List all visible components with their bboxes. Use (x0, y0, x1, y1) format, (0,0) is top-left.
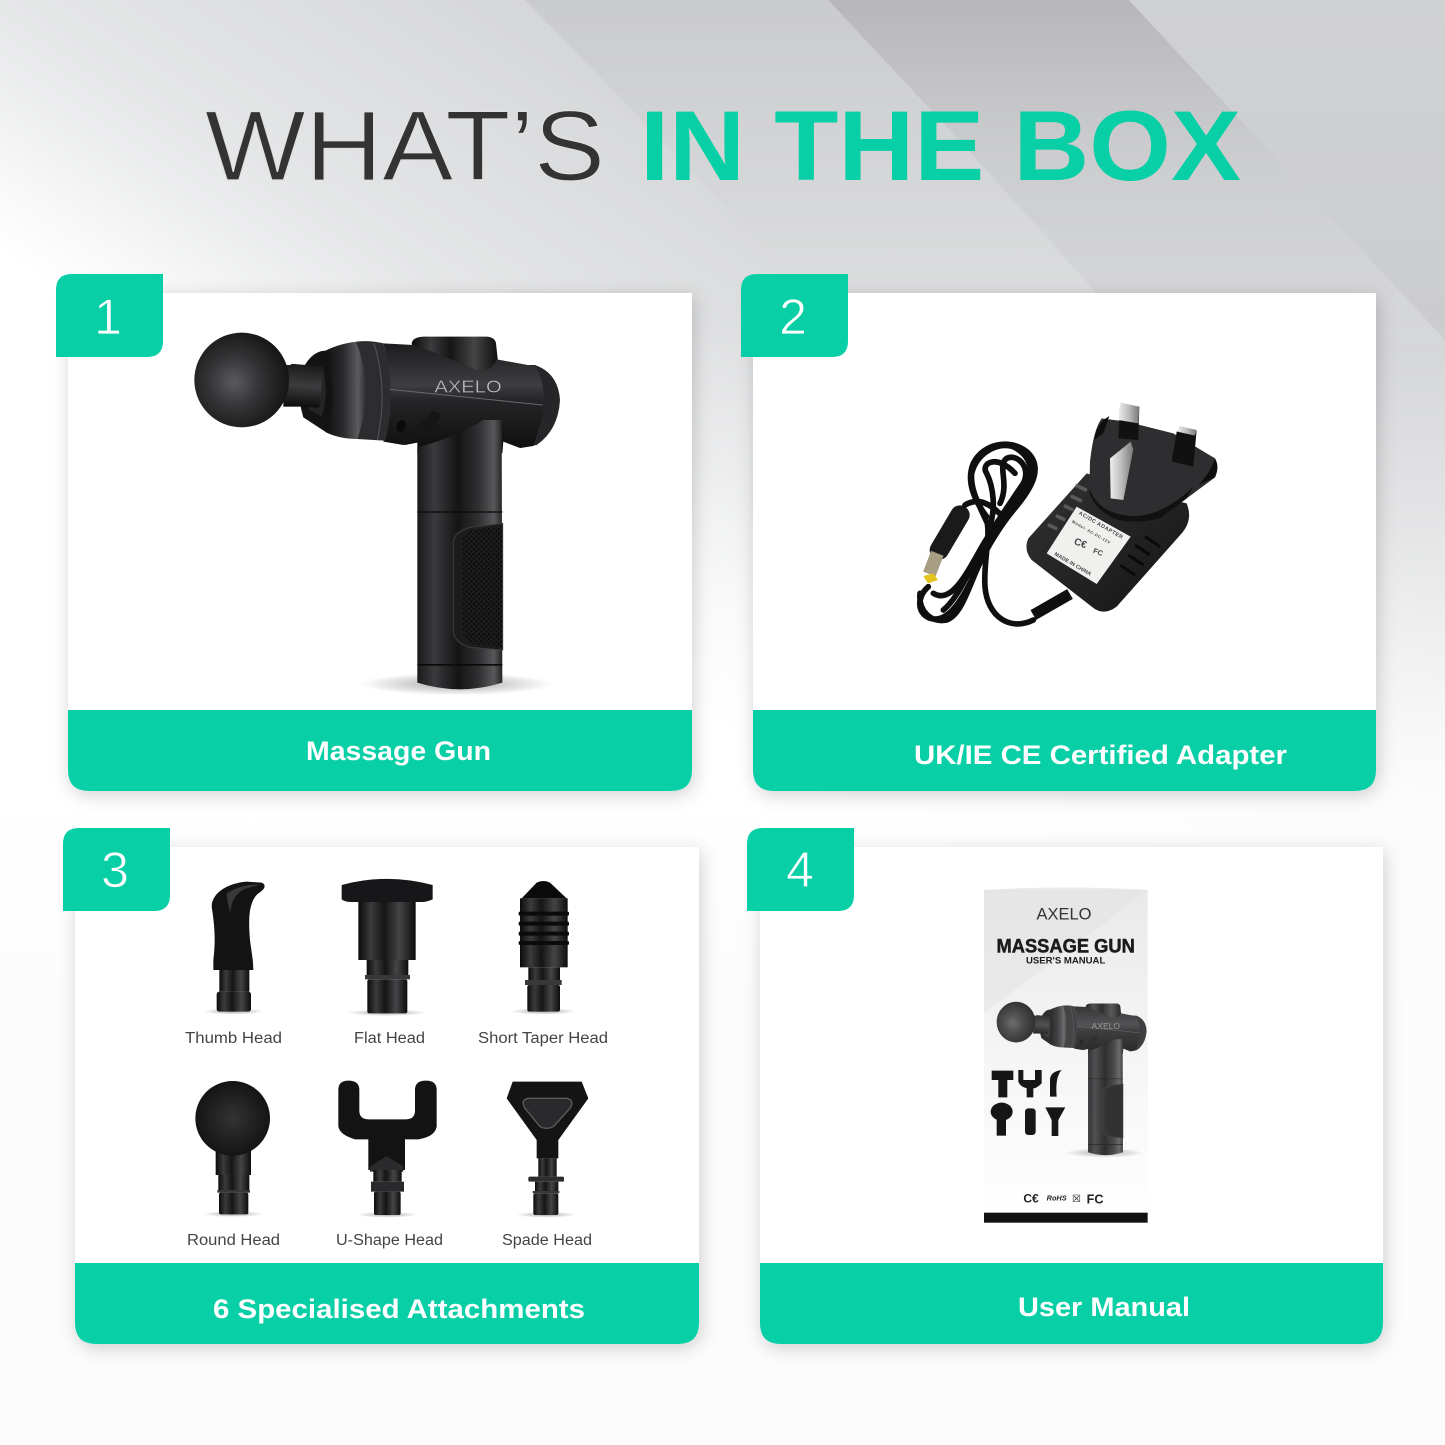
booklet text: AXELO (1036, 904, 1092, 923)
adapter label: FC (1092, 546, 1105, 558)
booklet certification marks: ☒ (1072, 1194, 1081, 1205)
adapter body (1026, 473, 1189, 612)
card 2 caption: UK/IE CE Certified Adapter (914, 740, 1288, 770)
booklet page (984, 887, 1148, 1223)
card 4 number tab: 4 (786, 842, 814, 898)
card 1 number tab (56, 274, 163, 357)
card 3 background (75, 847, 699, 1344)
cable (920, 444, 1035, 624)
attachment labels: Short Taper Head (478, 1030, 608, 1047)
connector plug (923, 515, 960, 583)
booklet certification marks: C€ (1023, 1192, 1039, 1206)
panel: attachments (63, 828, 699, 1344)
attachment labels: U-Shape Head (336, 1232, 443, 1249)
booklet certification marks (1023, 1192, 1104, 1206)
booklet text: USER'S MANUAL (1026, 955, 1106, 965)
title: WHAT’S (205, 90, 605, 201)
booklet attachments (991, 1070, 1065, 1136)
adapter label: C€ (1072, 536, 1088, 551)
manual booklet (984, 887, 1148, 1223)
attachment: short taper head (510, 881, 577, 1015)
attachment labels: Thumb Head (185, 1030, 282, 1047)
adapter label: AC/DC ADAPTER (1077, 511, 1124, 541)
card 3 caption: 6 Specialised Attachments (213, 1294, 585, 1324)
card 4 caption bar (760, 1263, 1383, 1344)
booklet certification marks: FC (1087, 1192, 1104, 1206)
booklet text (996, 904, 1135, 965)
card 1 caption: Massage Gun (306, 736, 491, 766)
booklet text: MASSAGE GUN (996, 937, 1135, 958)
attachment: spade head (507, 1082, 588, 1218)
card 1 number tab: 1 (94, 289, 122, 345)
plug face (1089, 418, 1217, 522)
card 2 background (753, 293, 1376, 791)
massage gun image (194, 333, 560, 695)
strain relief (1033, 594, 1070, 615)
plug pins (1118, 407, 1139, 440)
attachment labels: Round Head (187, 1232, 280, 1249)
card 2 caption bar (753, 710, 1376, 791)
card 1 background (68, 293, 692, 791)
card 3 caption bar (75, 1263, 699, 1344)
card 1 caption bar (68, 710, 692, 791)
title (205, 90, 1241, 201)
booklet certification marks: RoHS (1047, 1194, 1067, 1203)
card 2 number tab: 2 (779, 289, 807, 345)
panel: adapter (741, 274, 1376, 791)
panel: massage gun (56, 274, 692, 791)
adapter image (920, 403, 1217, 624)
attachment: thumb head (203, 882, 265, 1015)
attachments set (195, 879, 588, 1218)
card 4 caption: User Manual (1018, 1292, 1190, 1322)
attachment labels: Flat Head (354, 1030, 425, 1047)
card 4 number tab (747, 828, 854, 911)
card 2 number tab (741, 274, 848, 357)
booklet gun picture (997, 1002, 1147, 1158)
card 4 background (760, 847, 1383, 1344)
adapter label (1047, 507, 1131, 584)
attachment labels (185, 1030, 608, 1249)
panel: user manual (747, 828, 1383, 1344)
attachment: u-shape head (338, 1081, 437, 1218)
title: IN THE BOX (640, 90, 1241, 201)
attachment: flat head (342, 879, 433, 1016)
card 3 number tab: 3 (101, 842, 129, 898)
manual booklet: AXELO (1092, 1022, 1120, 1031)
adapter label: Model: AC-DC-12V (1071, 519, 1111, 545)
attachment: round head (195, 1081, 270, 1217)
adapter label: MADE IN CHINA (1053, 552, 1092, 578)
attachment labels: Spade Head (502, 1232, 592, 1249)
card 3 number tab (63, 828, 170, 911)
massage gun image: AXELO (434, 377, 502, 397)
